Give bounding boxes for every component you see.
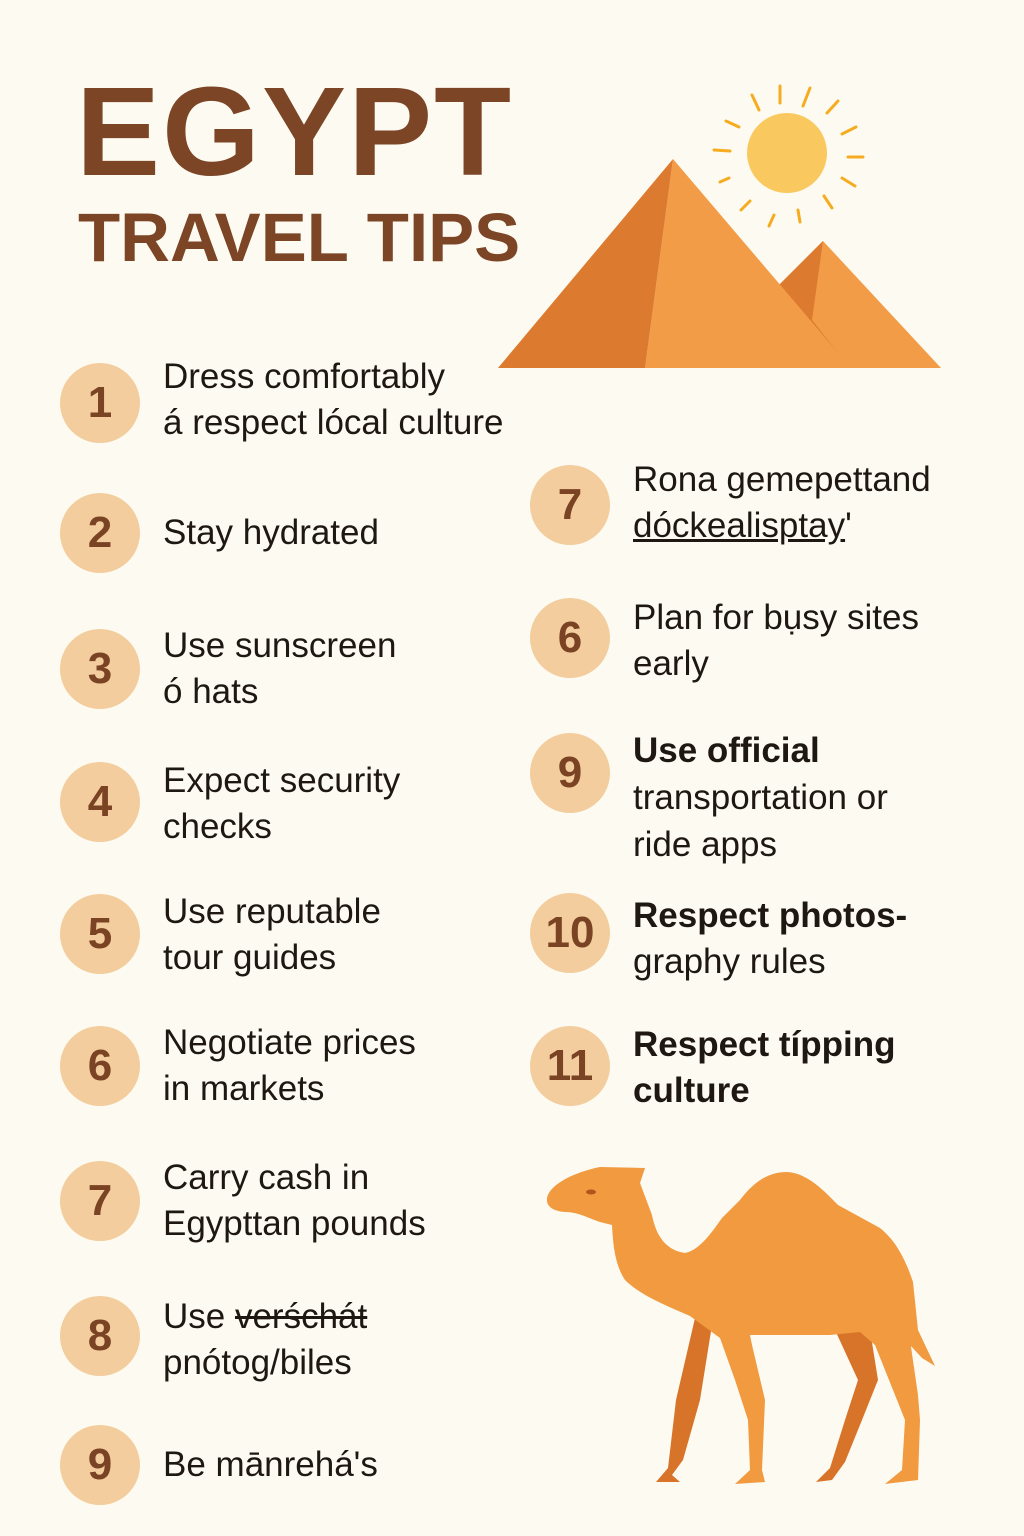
tip 3: 3 (88, 644, 112, 693)
tip 7 (60, 1158, 426, 1243)
tip 10: Respect photos- (633, 896, 907, 935)
tip 6 right: early (633, 644, 709, 683)
tip 7: Carry cash in (163, 1158, 369, 1197)
tip 6 right: Plan for bụsy sites (633, 598, 919, 637)
tip 7 right: 7 (558, 480, 582, 529)
tip 4: checks (163, 807, 272, 846)
tip 10 (530, 893, 907, 981)
tip 11: 11 (547, 1041, 593, 1090)
tip 11: culture (633, 1071, 750, 1110)
tip 7: 7 (88, 1176, 112, 1225)
tip 2 (60, 493, 379, 573)
tip 9 right: 9 (558, 748, 582, 797)
tip 5: Use reputable (163, 892, 381, 931)
tip 1: 1 (88, 378, 112, 427)
tip 9 right (530, 731, 888, 864)
tip 2: 2 (88, 508, 112, 557)
tip 3: ó hats (163, 672, 258, 711)
title: EGYPT (76, 61, 513, 202)
tip 3 (60, 626, 396, 711)
tip 7 right: dóckealisptay' (633, 506, 852, 545)
tip 6: 6 (88, 1041, 112, 1090)
illustration: pyramids and sun (498, 84, 941, 368)
tip 4: 4 (88, 777, 112, 826)
icon: camel (546, 1167, 935, 1484)
tip 1: á respect lócal culture (163, 403, 503, 442)
tip 9 right: Use official (633, 731, 820, 770)
tip 3: Use sunscreen (163, 626, 396, 665)
tip 8: Use verśchát (163, 1297, 367, 1336)
subtitle: TRAVEL TIPS (78, 199, 520, 276)
tip 5 (60, 892, 381, 977)
tip 6: in markets (163, 1069, 324, 1108)
icon: small pyramid (779, 241, 941, 368)
tip 5: tour guides (163, 938, 336, 977)
tip 2: Stay hydrated (163, 513, 379, 552)
icon: big pyramid (498, 159, 851, 368)
tip 1: Dress comfortably (163, 357, 445, 396)
tips: right column (530, 460, 931, 1110)
tip 6 right (530, 598, 919, 683)
tip 9: 9 (88, 1440, 112, 1489)
tip 11 (530, 1025, 896, 1110)
tip 8: 8 (88, 1311, 112, 1360)
tip 7: Egypttan pounds (163, 1204, 426, 1243)
tip 9: Be mānrehá's (163, 1445, 378, 1484)
tip 4: Expect security (163, 761, 400, 800)
tip 4 (60, 761, 400, 846)
tip 7 right (530, 460, 931, 545)
tips: right column: ride apps (633, 825, 777, 864)
tip 6 right: 6 (558, 613, 582, 662)
tip 6: Negotiate prices (163, 1023, 416, 1062)
tip 8 (60, 1296, 368, 1382)
icon: sun (714, 86, 863, 226)
tip 5: 5 (88, 909, 112, 958)
tip 6 (60, 1023, 416, 1108)
tips: left column (60, 357, 503, 1505)
tip 8: pnótog/biles (163, 1343, 352, 1382)
tip 10: graphy rules (633, 942, 826, 981)
tip 7 right: Rona gemepettand (633, 460, 931, 499)
tip 9 (60, 1425, 378, 1505)
tip 11: Respect típping (633, 1025, 896, 1064)
tip 9 right: transportation or (633, 778, 888, 817)
tip 1 (60, 357, 503, 443)
tip 10: 10 (546, 908, 594, 957)
